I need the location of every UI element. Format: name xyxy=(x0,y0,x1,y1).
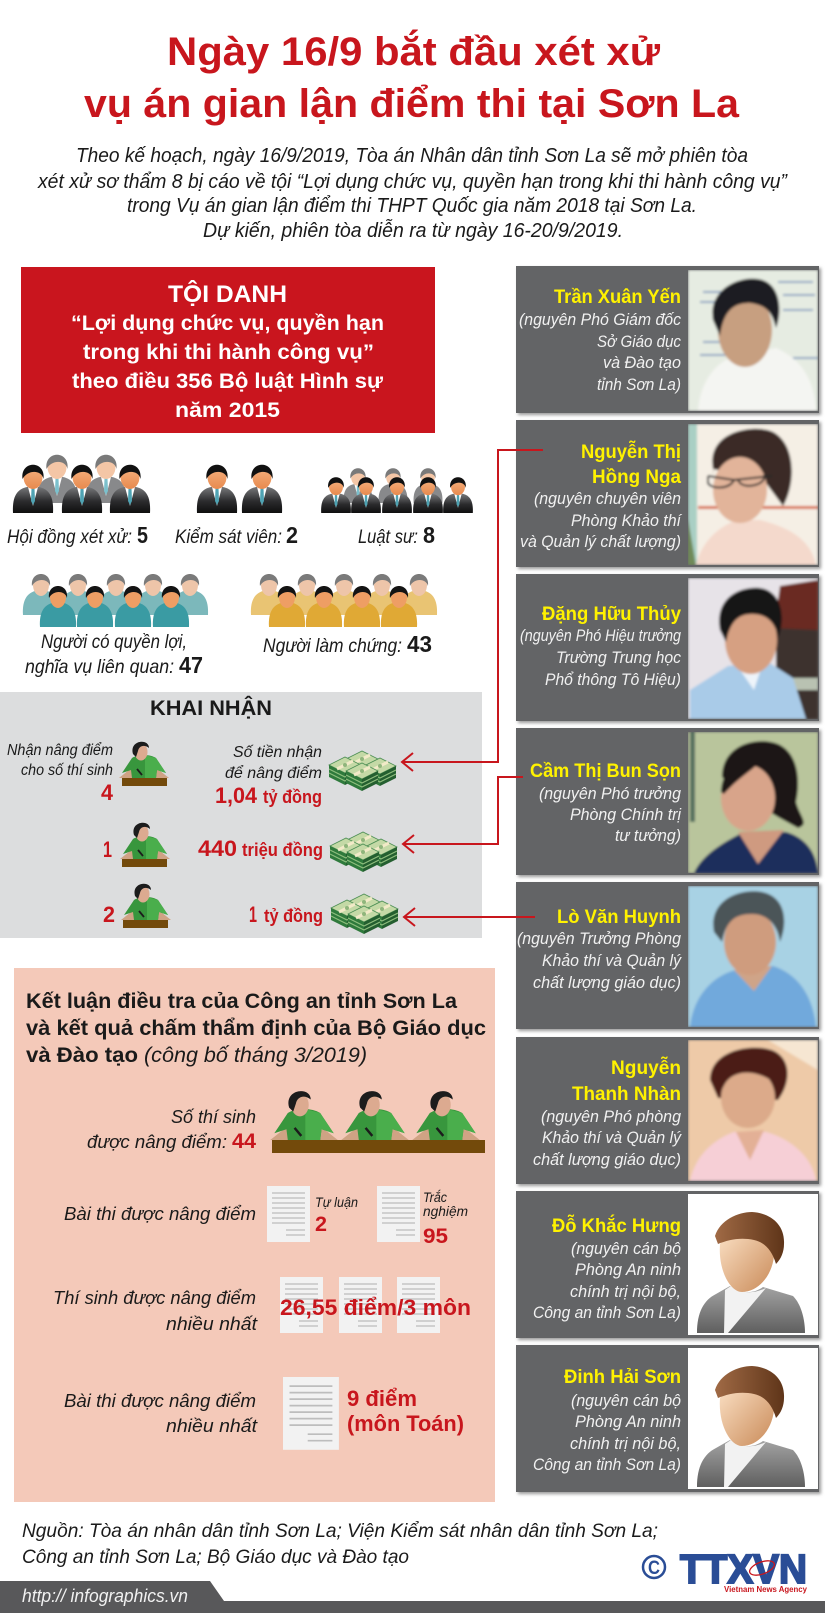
row 2: 1 candidate, 440 million xyxy=(103,823,397,872)
row 2: 1 candidate, 440 million: triệu đồng xyxy=(242,840,323,860)
panel: Đặng Hữu Thủy: (nguyên Phó Hiệu trưởng xyxy=(520,627,682,645)
lawyers group: 8 xyxy=(423,522,435,548)
footer bar xyxy=(0,1581,825,1613)
panel: Trần Xuân Yến: Trần Xuân Yến xyxy=(554,287,681,308)
arrow: Lò Văn Huynh to 1 billion xyxy=(404,908,535,926)
panel: charge: TỘI DANH xyxy=(168,280,287,308)
witnesses group: Người làm chứng: xyxy=(263,636,402,657)
prosecutors group: 2 xyxy=(286,522,298,548)
panel: Đỗ Khắc Hưng: chính trị nội bộ, xyxy=(570,1283,681,1301)
related parties group xyxy=(23,574,208,678)
related parties group: Người có quyền lợi, xyxy=(41,632,187,653)
panel: Cầm Thị Bun Sọn xyxy=(516,728,821,877)
witnesses group: 43 xyxy=(407,631,432,657)
panel: Lò Văn Huynh: chất lượng giáo dục) xyxy=(533,974,681,992)
title xyxy=(84,28,740,126)
panel: Đinh Hải Sơn: chính trị nội bộ, xyxy=(570,1435,681,1453)
row 3: 2 candidates, 1 billion: tỷ đồng xyxy=(264,906,323,926)
panel: Đinh Hải Sơn: Công an tỉnh Sơn La) xyxy=(533,1456,681,1474)
panel: Lò Văn Huynh: Lò Văn Huynh xyxy=(557,907,681,928)
row: highest candidate: nhiều nhất xyxy=(166,1314,258,1334)
lawyers group: Luật sư: xyxy=(358,527,418,548)
conclusion heading: (công bố tháng 3/2019) xyxy=(144,1044,367,1067)
row 3: 2 candidates, 1 billion: 2 xyxy=(103,902,115,927)
panel: Đỗ Khắc Hưng: (nguyên cán bộ xyxy=(571,1240,681,1258)
panel: Cầm Thị Bun Sọn: Cầm Thị Bun Sọn xyxy=(530,761,681,782)
photo xyxy=(688,886,818,1027)
panel: Cầm Thị Bun Sọn: (nguyên Phó trưởng xyxy=(539,785,682,803)
panel: Trần Xuân Yến: và Đào tạo xyxy=(603,354,681,372)
panel: Nguyễn Thanh Nhàn: Khảo thí và Quản lý xyxy=(542,1129,683,1147)
row: 44 candidates: 44 xyxy=(232,1130,256,1153)
source text xyxy=(22,1521,658,1568)
conclusion heading xyxy=(26,990,486,1067)
row: highest paper: (môn Toán) xyxy=(347,1411,464,1436)
row: upgraded papers: Tự luận xyxy=(315,1195,358,1210)
conclusion heading: và Đào tạo xyxy=(26,1044,138,1067)
row 2: 1 candidate, 440 million: 1 xyxy=(103,837,112,862)
panel: Trần Xuân Yến xyxy=(516,266,821,415)
row 1: 4 candidates, 1.04 billion: cho số thí sinh xyxy=(21,762,113,779)
panel: Nguyễn Thị Hồng Nga: Phòng Khảo thí xyxy=(571,512,682,530)
icon: anonymous avatar xyxy=(688,1194,818,1335)
panel: charge: trong khi thi hành công vụ” xyxy=(83,341,374,364)
row: 44 candidates: được nâng điểm: xyxy=(87,1132,227,1152)
logo: TTXVN: TTXVN xyxy=(680,1546,807,1592)
panel: Trần Xuân Yến: (nguyên Phó Giám đốc xyxy=(519,311,682,329)
source text: Công an tỉnh Sơn La; Bộ Giáo dục và Đào tạo xyxy=(22,1547,409,1568)
row: upgraded papers: nghiệm xyxy=(423,1204,468,1219)
row 1: 4 candidates, 1.04 billion: tỷ đồng xyxy=(263,787,322,807)
panel: charge: “Lợi dụng chức vụ, quyền hạn xyxy=(71,312,384,335)
panel: Đỗ Khắc Hưng: Công an tỉnh Sơn La) xyxy=(533,1304,681,1322)
panel: Đỗ Khắc Hưng: Đỗ Khắc Hưng xyxy=(552,1215,681,1237)
panel: Trần Xuân Yến: Sở Giáo dục xyxy=(597,333,682,351)
logo: TTXVN: C xyxy=(648,1558,660,1579)
row 1: 4 candidates, 1.04 billion: 4 xyxy=(101,780,114,805)
row: highest candidate: Thí sinh được nâng điểm xyxy=(53,1288,256,1308)
footer bar: http:// infographics.vn xyxy=(22,1586,188,1606)
row: upgraded papers: 95 xyxy=(423,1225,448,1248)
witnesses group xyxy=(251,574,437,657)
panel: Nguyễn Thị Hồng Nga: và Quản lý chất lượng) xyxy=(520,533,681,551)
photo xyxy=(688,270,818,411)
panel: Đinh Hải Sơn xyxy=(516,1345,821,1494)
logo: TTXVN: Vietnam News Agency xyxy=(724,1585,808,1594)
panel: Cầm Thị Bun Sọn: tư tưởng) xyxy=(615,827,681,845)
panel: Nguyễn Thị Hồng Nga: Nguyễn Thị xyxy=(581,441,681,463)
panel: Nguyễn Thanh Nhàn: chất lượng giáo dục) xyxy=(533,1151,681,1169)
row: upgraded papers: 2 xyxy=(315,1213,327,1236)
panel: charge xyxy=(21,267,435,433)
photo xyxy=(688,732,818,873)
panel: Nguyễn Thị Hồng Nga: Hồng Nga xyxy=(592,467,681,488)
confessions heading: KHAI NHẬN xyxy=(150,696,272,720)
prosecutors group xyxy=(175,465,298,548)
panel: Lò Văn Huynh: (nguyên Trưởng Phòng xyxy=(517,930,682,948)
photo xyxy=(688,1040,818,1181)
panel: Đỗ Khắc Hưng: Phòng An ninh xyxy=(575,1261,681,1279)
panel: Trần Xuân Yến: tỉnh Sơn La) xyxy=(597,376,681,394)
panel: Nguyễn Thanh Nhàn xyxy=(516,1037,821,1186)
lawyers group xyxy=(321,468,473,548)
conclusion heading: và kết quả chấm thẩm định của Bộ Giáo dục xyxy=(26,1017,486,1040)
row 3: 2 candidates, 1 billion xyxy=(103,884,398,934)
panel: Nguyễn Thanh Nhàn: (nguyên Phó phòng xyxy=(541,1108,682,1126)
row 1: 4 candidates, 1.04 billion xyxy=(7,742,396,808)
panel: Nguyễn Thanh Nhàn: Thanh Nhàn xyxy=(572,1084,681,1105)
row 1: 4 candidates, 1.04 billion: 1,04 xyxy=(215,783,258,808)
conclusion heading: Kết luận điều tra của Công an tỉnh Sơn La xyxy=(26,990,457,1013)
panel: Đinh Hải Sơn: Phòng An ninh xyxy=(575,1413,681,1431)
photo xyxy=(688,424,818,565)
row: upgraded papers xyxy=(64,1186,468,1248)
panel: Đặng Hữu Thủy: Trường Trung học xyxy=(556,649,682,667)
intro text: trong Vụ án gian lận điểm thi THPT Quốc gia năm 2018 tại Sơn La. xyxy=(127,195,697,217)
intro text: Theo kế hoạch, ngày 16/9/2019, Tòa án Nhân dân tỉnh Sơn La sẽ mở phiên tòa xyxy=(76,145,748,167)
trial council group: 5 xyxy=(137,522,148,548)
row: 44 candidates xyxy=(87,1091,485,1153)
row 1: 4 candidates, 1.04 billion: Nhận nâng điểm xyxy=(7,742,113,759)
arrow: Hồng Nga to 1.04 billion xyxy=(402,450,543,771)
row: highest candidate: 26,55 điểm/3 môn xyxy=(280,1295,471,1320)
panel: Nguyễn Thị Hồng Nga xyxy=(516,420,821,569)
panel: Đặng Hữu Thủy: Phổ thông Tô Hiệu) xyxy=(545,671,681,689)
row 1: 4 candidates, 1.04 billion: Số tiền nhận xyxy=(233,744,322,761)
related parties group: 47 xyxy=(179,652,203,678)
panel: Lò Văn Huynh: Khảo thí và Quản lý xyxy=(542,952,683,970)
row: upgraded papers: Bài thi được nâng điểm xyxy=(64,1204,256,1224)
icon: anonymous avatar xyxy=(688,1348,818,1489)
panel: charge: theo điều 356 Bộ luật Hình sự xyxy=(72,370,384,393)
panel: Nguyễn Thị Hồng Nga: (nguyên chuyên viên xyxy=(534,490,681,508)
panel: investigation conclusion xyxy=(14,968,495,1502)
row: highest paper: Bài thi được nâng điểm xyxy=(64,1391,256,1411)
intro text xyxy=(37,145,788,242)
row: highest paper xyxy=(64,1377,464,1450)
panel: Đinh Hải Sơn: (nguyên cán bộ xyxy=(571,1392,681,1410)
arrow: Bun Sọn to 440 million xyxy=(403,777,523,853)
source text: Nguồn: Tòa án nhân dân tỉnh Sơn La; Viện Kiểm sát nhân dân tỉnh Sơn La; xyxy=(22,1521,658,1542)
trial council group: Hội đồng xét xử: xyxy=(7,527,132,548)
row: highest paper: nhiều nhất xyxy=(166,1416,258,1436)
panel: Đặng Hữu Thủy xyxy=(516,574,821,723)
panel: Đinh Hải Sơn: Đinh Hải Sơn xyxy=(564,1367,681,1388)
panel: charge: năm 2015 xyxy=(175,399,280,422)
row 1: 4 candidates, 1.04 billion: để nâng điểm xyxy=(225,764,322,782)
panel: Cầm Thị Bun Sọn: Phòng Chính trị xyxy=(570,806,682,824)
title: Ngày 16/9 bắt đầu xét xử xyxy=(167,28,660,74)
panel: Đặng Hữu Thủy: Đặng Hữu Thủy xyxy=(542,604,681,625)
row: highest candidate xyxy=(53,1277,471,1334)
panel: confessions xyxy=(0,692,482,938)
row: 44 candidates: Số thí sinh xyxy=(171,1107,256,1127)
row 2: 1 candidate, 440 million: 440 xyxy=(198,836,237,861)
trial council group xyxy=(7,455,150,548)
row: highest paper: 9 điểm xyxy=(347,1386,417,1411)
panel: Đỗ Khắc Hưng xyxy=(516,1191,821,1340)
title: vụ án gian lận điểm thi tại Sơn La xyxy=(84,82,740,126)
panel: Lò Văn Huynh xyxy=(516,882,821,1031)
photo xyxy=(688,578,818,719)
row: upgraded papers: Trắc xyxy=(423,1190,447,1205)
intro text: xét xử sơ thẩm 8 bị cáo về tội “Lợi dụng chức vụ, quyền hạn trong khi thi hành công vụ” xyxy=(37,171,788,193)
intro text: Dự kiến, phiên tòa diễn ra từ ngày 16-20/9/2019. xyxy=(203,219,623,242)
panel: Nguyễn Thanh Nhàn: Nguyễn xyxy=(611,1057,681,1079)
related parties group: nghĩa vụ liên quan: xyxy=(25,657,174,678)
prosecutors group: Kiểm sát viên: xyxy=(175,527,282,548)
row 3: 2 candidates, 1 billion: 1 xyxy=(249,902,257,927)
